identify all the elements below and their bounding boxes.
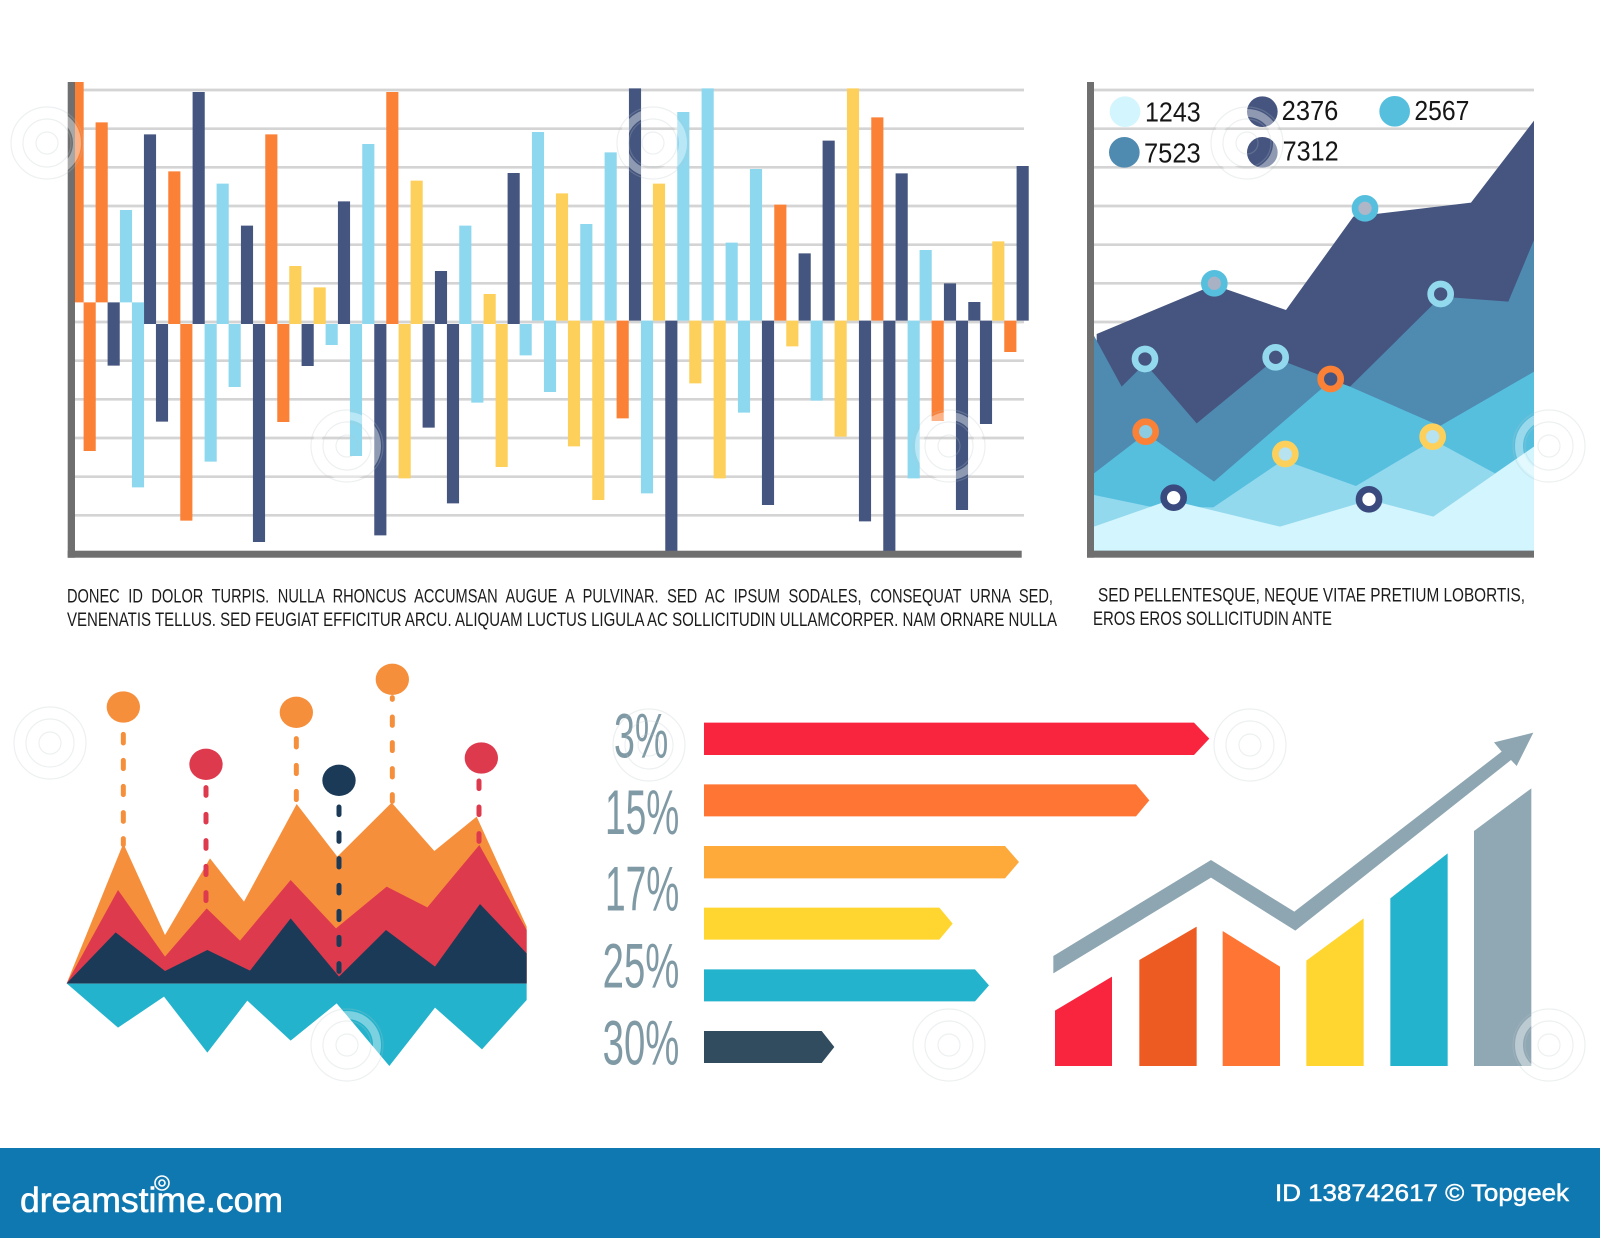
percentage labels: 15% [605, 778, 679, 848]
lower bars, right half [550, 321, 1010, 551]
rising bars [1055, 788, 1531, 1066]
pin circles [107, 664, 498, 796]
lower bars, left half [90, 302, 526, 542]
icon: spiral logo [155, 1176, 169, 1190]
legend: 1243 [1145, 97, 1201, 128]
chart axes [68, 82, 1022, 558]
footer band [0, 1148, 1600, 1238]
percentage labels [603, 702, 679, 1078]
dashed leader lines [123, 698, 479, 971]
text block: left caption: DONEC ID DOLOR TURPIS. NULLA RHONCUS ACCUMSAN AUGUE A PULVINAR. SED AC IPSUM SODALES, CONSEQUAT URNA SED, [67, 586, 1053, 608]
image id credit: ID 138742617 © Topgeek [1275, 1180, 1570, 1207]
arrow bars [704, 723, 1209, 1063]
text block: right caption: EROS EROS SOLLICITUDIN ANTE [1093, 608, 1332, 630]
upper bars, right half [562, 88, 1023, 321]
data point rings [1135, 198, 1451, 509]
axes [1087, 82, 1534, 558]
panel: diverging bar chart [68, 82, 1024, 558]
upper bars, left half [79, 82, 538, 324]
legend [1109, 95, 1469, 168]
orange area [67, 803, 527, 983]
red area [67, 845, 527, 983]
legend: 2376 [1282, 95, 1338, 126]
percentage labels: 3% [614, 702, 668, 772]
logo text: dreamstime.com [20, 1181, 283, 1220]
area layers [1090, 121, 1534, 551]
text block: left caption: VENENATIS TELLUS. SED FEUGIAT EFFICITUR ARCU. ALIQUAM LUCTUS LIGULA AC SOLLICITUDIN ULLAMCORPER. NAM ORNARE NULLA [67, 609, 1057, 631]
panel: layered area chart [1087, 82, 1534, 558]
percentage labels: 17% [605, 855, 679, 925]
text block: left caption [67, 586, 1057, 631]
percentage labels: 25% [603, 931, 679, 1001]
panel: percentage arrow bars [603, 702, 1209, 1078]
panel: mountain area chart with pins [67, 664, 527, 1066]
watermark spirals [11, 107, 1585, 1081]
legend: 7523 [1144, 137, 1201, 168]
arrow: trend line [1053, 733, 1533, 973]
text block: right caption [1093, 584, 1525, 630]
percentage labels: 30% [603, 1008, 679, 1078]
panel: growth bar chart with arrow [1053, 733, 1533, 1066]
legend: 7312 [1283, 136, 1339, 167]
legend: 2567 [1414, 95, 1469, 126]
mirrored teal area [67, 983, 527, 1066]
navy area [67, 904, 527, 983]
